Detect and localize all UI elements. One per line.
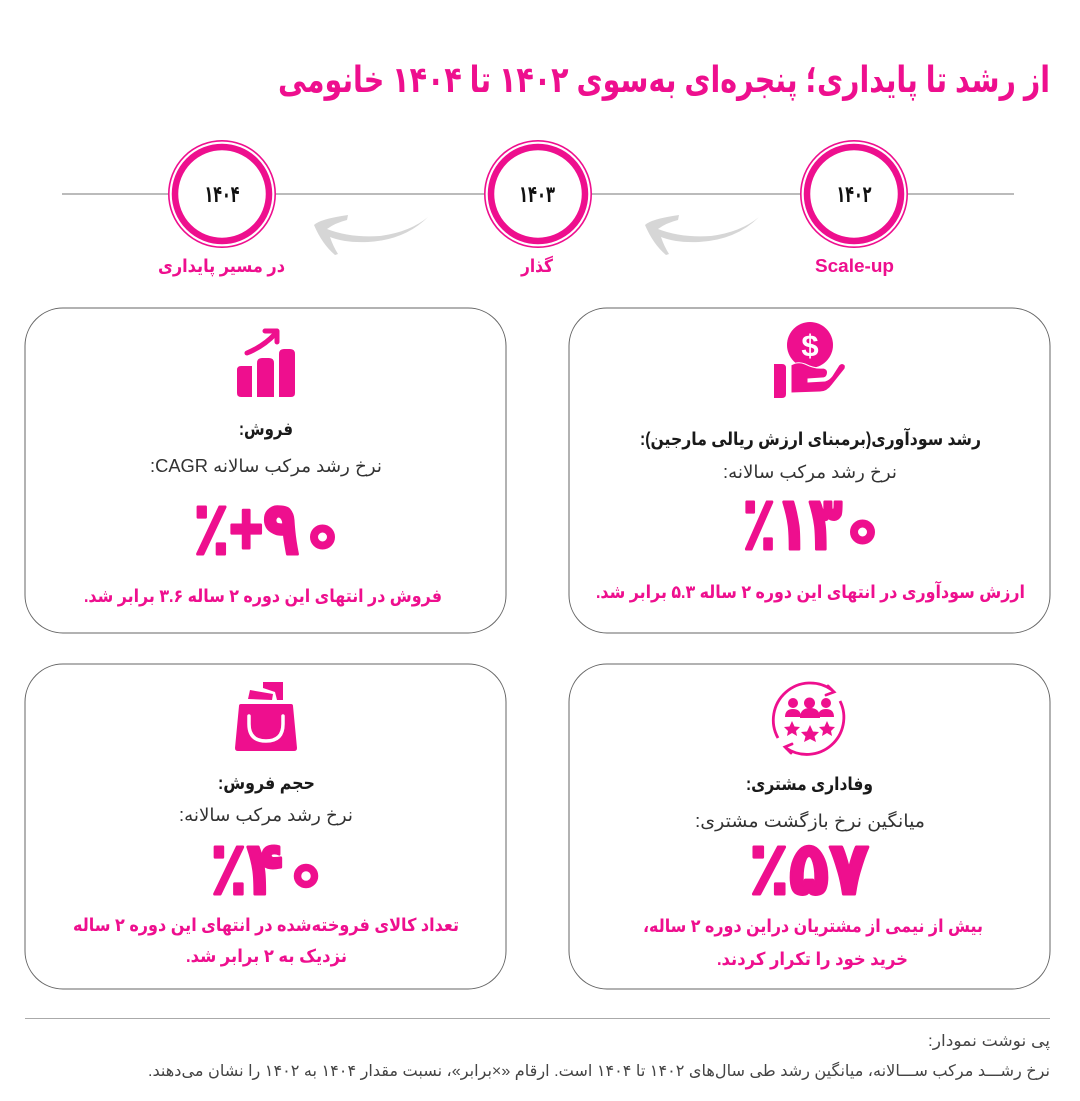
metric: 57 percent: ٪۵۷ bbox=[749, 827, 869, 910]
note line 1: تعداد کالای فروخته‌شده در انتهای این دوره ۲ ساله bbox=[73, 915, 459, 936]
note: ارزش سودآوری در انتهای این دوره ۲ ساله ۵.۳ برابر شد. bbox=[596, 580, 1025, 603]
note line 2: نزدیک به ۲ برابر شد. bbox=[186, 946, 347, 967]
footnote text: نرخ رشـــد مرکب ســـالانه، میانگین رشد طی سال‌های ۱۴۰۲ تا ۱۴۰۴ است. ارقام «×برابر»، نسبت مقدار ۱۴۰۴ به ۱۴۰۲ را نشان می‌دهند. bbox=[148, 1061, 1050, 1081]
subheading: نرخ رشد مرکب سالانه: bbox=[723, 462, 897, 483]
icon: hand holding coin: $ bbox=[801, 328, 819, 363]
note line 2: خرید خود را تکرار کردند. bbox=[717, 949, 908, 970]
icon: rising bar chart bbox=[237, 331, 295, 397]
footnote heading: پی نوشت نمودار: bbox=[928, 1033, 1050, 1051]
arrow: 1402 to 1403 bbox=[645, 215, 759, 255]
metric: 90 percent: ٪+۹۰ bbox=[194, 487, 334, 570]
label: transition: گذار bbox=[520, 255, 553, 276]
heading: sales volume: حجم فروش: bbox=[218, 773, 315, 794]
milestone: 1403 bbox=[485, 141, 591, 247]
arrow: 1403 to 1404 bbox=[314, 215, 428, 255]
panel: customer loyalty bbox=[569, 664, 1050, 989]
heading: sales: فروش: bbox=[239, 419, 293, 440]
panel: profitability bbox=[569, 308, 1050, 633]
milestone: 1402: ۱۴۰۲ bbox=[836, 181, 872, 207]
note: فروش در انتهای این دوره ۲ ساله ۳.۶ برابر شد. bbox=[84, 586, 442, 607]
label: on the path to sustainability: در مسیر پایداری bbox=[158, 256, 285, 277]
metric: 130 percent: ٪۱۳۰ bbox=[742, 482, 876, 565]
heading: profitability growth: رشد سودآوری(برمبنای ارزش ریالی مارجین): bbox=[640, 427, 981, 450]
milestone: 1403: ۱۴۰۳ bbox=[519, 181, 555, 207]
label: Scale-up: Scale-up bbox=[815, 256, 894, 276]
subheading: نرخ رشد مرکب سالانه: bbox=[179, 805, 353, 826]
note line 1: بیش از نیمی از مشتریان دراین دوره ۲ ساله، bbox=[643, 916, 983, 937]
milestone: 1404: ۱۴۰۴ bbox=[204, 181, 240, 207]
timeline bbox=[62, 141, 1014, 247]
icon: hand holding coin bbox=[774, 322, 845, 398]
metric: 40 percent: ٪۴۰ bbox=[210, 827, 320, 910]
panel: sales bbox=[25, 308, 506, 633]
milestone: 1404 bbox=[169, 141, 275, 247]
milestone: 1402 bbox=[801, 141, 907, 247]
subheading: نرخ رشد مرکب سالانه CAGR: bbox=[150, 456, 382, 477]
icon: shopping bag bbox=[235, 682, 297, 751]
panel: sales volume bbox=[25, 664, 506, 989]
icon: customers and stars bbox=[773, 683, 844, 754]
heading: customer loyalty: وفاداری مشتری: bbox=[746, 774, 873, 795]
subheading: میانگین نرخ بازگشت مشتری: bbox=[695, 810, 925, 832]
